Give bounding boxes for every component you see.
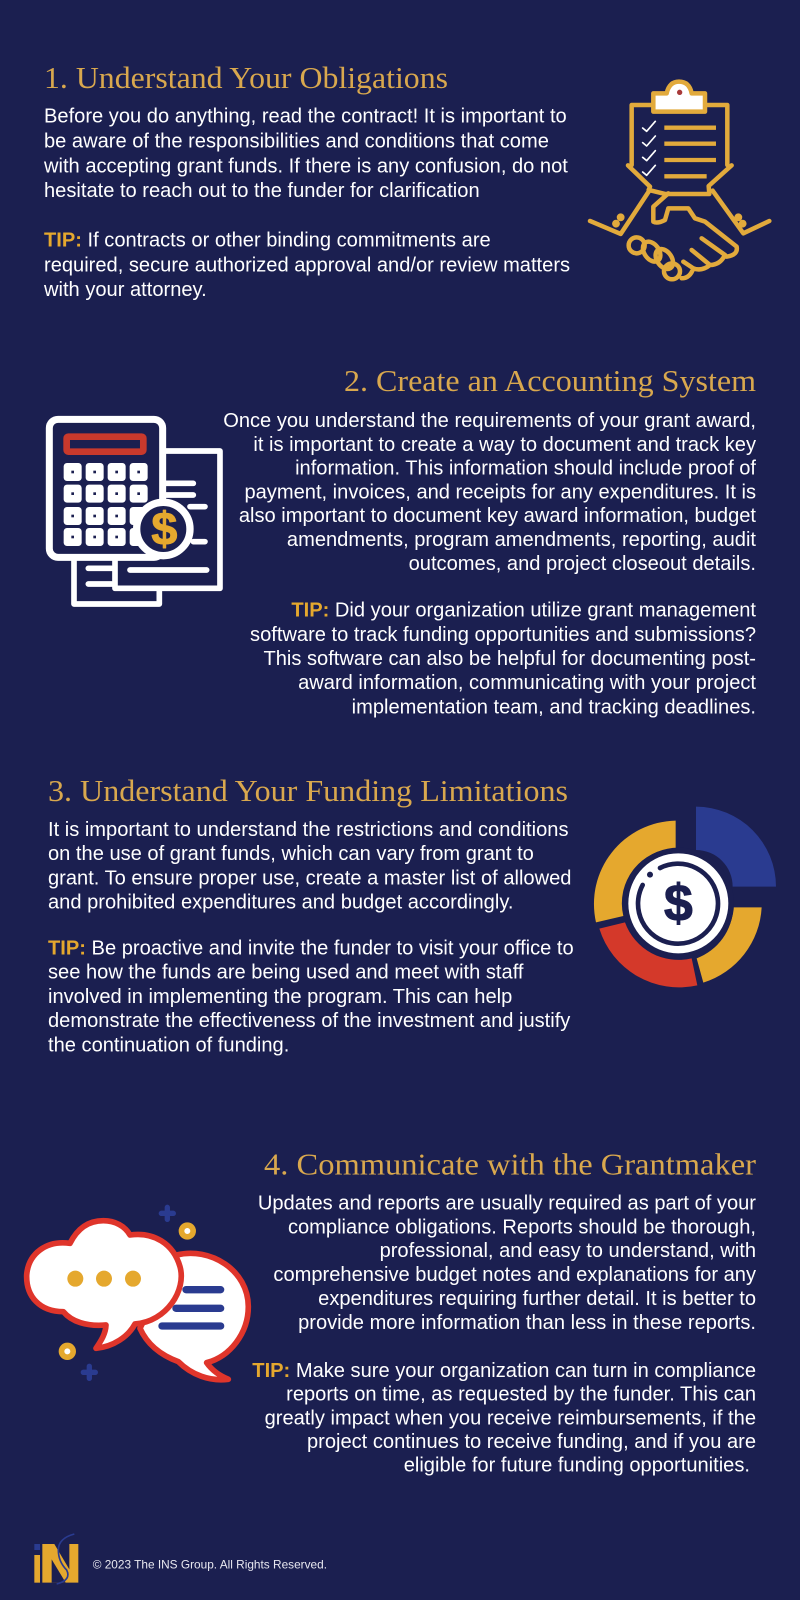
footer: [34, 1534, 327, 1584]
heading: section 3: 3. Understand Your Funding Limitations: [48, 773, 568, 808]
text block: section 4 tip: greatly impact when you receive reimbursements, if the: [265, 1407, 756, 1429]
text block: section 2 body: payment, invoices, and receipts for any expenditures. It is: [244, 481, 756, 503]
text block: section 4 body: provide more information than less in these reports.: [298, 1312, 756, 1334]
heading: section 4: 4. Communicate with the Grantmaker: [264, 1147, 757, 1182]
text block: section 2 tip: [250, 600, 756, 718]
text block: section 4 tip: TIP: Make sure your organization can turn in compliance: [252, 1360, 756, 1382]
text block: section 2 body: information. This information should include proof of: [295, 458, 756, 480]
text block: section 2 tip: This software can also be helpful for documenting post-: [263, 648, 756, 670]
icon: clipboard and handshake: [590, 82, 769, 279]
text block: section 1 body: be aware of the responsibilities and conditions that come: [44, 130, 549, 152]
text block: section 3 tip: see how the funds are being used and meet with staff: [48, 962, 524, 984]
icon: donut chart with dollar: [594, 807, 776, 987]
text block: section 1 body: with accepting grant funds. If there is any confusion, do not: [43, 155, 568, 177]
icon: donut chart with dollar: $: [664, 874, 693, 932]
text block: section 3 body: on the use of grant funds, which can vary from grant to: [48, 843, 534, 865]
text block: section 2 body: [223, 410, 756, 575]
text block: section 2 tip: award information, communicating with your project: [298, 672, 756, 694]
text block: section 1 body: hesitate to reach out to the funder for clarification: [44, 180, 480, 202]
text block: section 2 body: also important to document key award information, budget: [239, 505, 756, 527]
heading: section 2: 2. Create an Accounting System: [344, 363, 756, 398]
panel: section 1 understand your obligations: [43, 60, 769, 301]
text block: section 4 tip: eligible for future funding opportunities.: [404, 1455, 750, 1477]
text block: section 2 tip: software to track funding opportunities and submissions?: [250, 624, 756, 646]
icon: calculator and documents: $: [151, 503, 177, 555]
text block: section 3 tip: TIP: Be proactive and invite the funder to visit your office to: [48, 937, 574, 959]
text block: section 2 body: amendments, program amendments, reporting, audit: [287, 529, 756, 551]
logo: INS: [34, 1534, 78, 1584]
text block: section 3 body: and prohibited expenditures and budget accordingly.: [48, 892, 513, 914]
text block: section 1 body: Before you do anything, read the contract! It is important to: [44, 106, 567, 128]
text block: section 4 body: [258, 1192, 756, 1334]
text block: section 4 body: compliance obligations. Reports should be thorough,: [288, 1216, 756, 1238]
text block: section 3 tip: involved in implementing the program. This can help: [48, 986, 512, 1008]
text block: section 3 body: [48, 819, 571, 914]
text block: section 4 body: Updates and reports are usually required as part of your: [258, 1192, 756, 1214]
text block: section 2 body: outcomes, and project closeout details.: [409, 553, 756, 575]
text block: section 2 body: it is important to create a way to document and track key: [253, 434, 756, 456]
panel: section 4 communicate with the grantmaker: [27, 1147, 757, 1477]
text block: section 1 body: [43, 106, 568, 202]
text block: section 4 body: professional, and easy to understand, with: [380, 1240, 756, 1262]
text block: section 3 tip: the continuation of funding.: [48, 1034, 289, 1056]
text block: section 1 tip: [43, 229, 570, 301]
text block: section 1 tip: with your attorney.: [43, 279, 207, 301]
text block: section 4 tip: reports on time, as requested by the funder. This can: [286, 1384, 756, 1406]
text block: section 2 tip: implementation team, and tracking deadlines.: [352, 696, 756, 718]
text block: section 4 body: comprehensive budget notes and explanations for any: [273, 1264, 756, 1286]
text block: section 3 body: grant. To ensure proper use, create a master list of allowed: [48, 867, 571, 889]
icon: calculator and documents: [49, 419, 220, 604]
text block: section 3 tip: [48, 937, 574, 1056]
icon: speech bubbles: [27, 1207, 248, 1380]
text block: section 4 tip: project continues to receive funding, and if you are: [307, 1431, 756, 1453]
panel: section 3 understand your funding limitations: [48, 773, 776, 1056]
text block: section 3 body: It is important to understand the restrictions and conditions: [48, 819, 568, 841]
text block: section 4 tip: [252, 1360, 756, 1477]
text block: section 2 body: Once you understand the requirements of your grant award,: [223, 410, 756, 432]
panel: section 2 create an accounting system: [49, 363, 756, 718]
text block: section 1 tip: TIP: If contracts or other binding commitments are: [44, 229, 491, 251]
heading: section 1: 1. Understand Your Obligations: [44, 60, 448, 95]
text block: section 4 body: expenditures requiring further detail. It is better to: [318, 1288, 756, 1310]
copyright text: © 2023 The INS Group. All Rights Reserved.: [93, 1558, 327, 1572]
text block: section 2 tip: TIP: Did your organization utilize grant management: [291, 600, 756, 622]
text block: section 1 tip: required, secure authorized approval and/or review matters: [44, 254, 570, 276]
text block: section 3 tip: demonstrate the effectiveness of the investment and justify: [48, 1010, 570, 1032]
